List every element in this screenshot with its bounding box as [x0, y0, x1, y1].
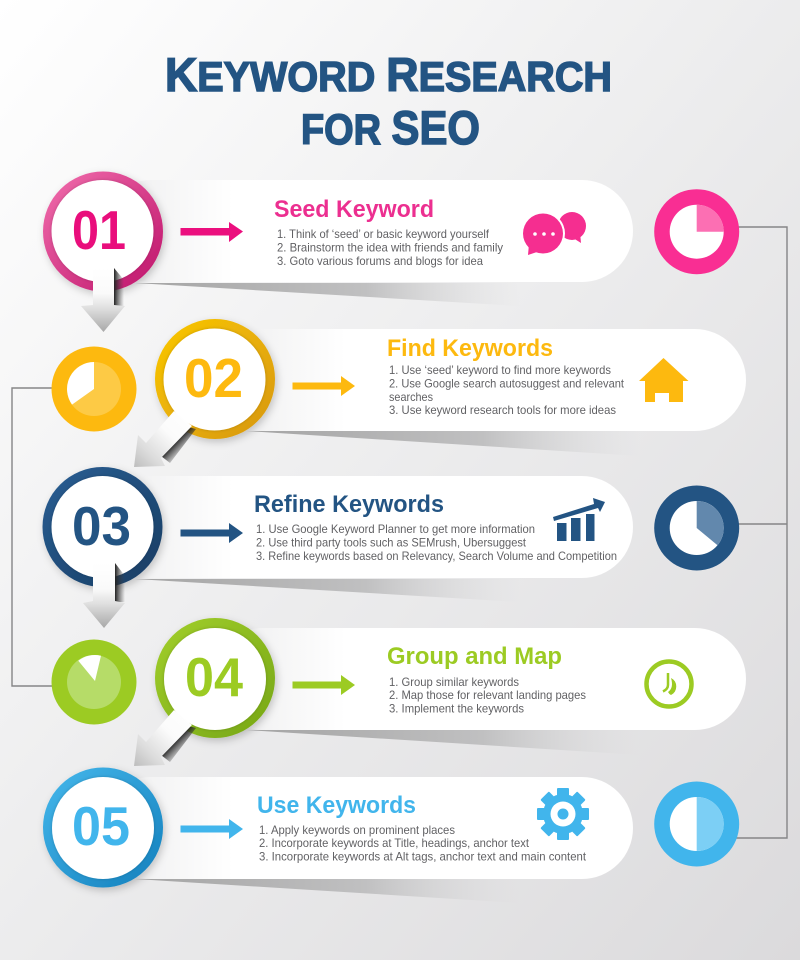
- list: 3. Goto various forums and blogs for idea: [277, 255, 484, 268]
- content pill: [212, 329, 746, 431]
- list: 2. Use third party tools such as SEMrush, Ubersuggest: [256, 536, 527, 550]
- right arrow: [180, 523, 243, 543]
- heading: Find Keywords: [387, 335, 553, 362]
- list: [277, 228, 503, 268]
- list: [389, 364, 625, 417]
- list: 1. Apply keywords on prominent places: [259, 824, 455, 837]
- icon: ring with note: [646, 662, 692, 706]
- heading: Seed Keyword: [274, 196, 434, 223]
- connector lines: [12, 227, 787, 838]
- list: 2. Map those for relevant landing pages: [389, 689, 586, 702]
- pie: small slice: [52, 640, 136, 724]
- right arrow: [292, 675, 355, 695]
- down arrow: [81, 268, 125, 332]
- down arrow: [83, 563, 125, 628]
- content pill: [100, 476, 633, 578]
- list: [256, 523, 617, 563]
- list: [389, 676, 586, 716]
- number badge 02: [155, 319, 275, 439]
- step 3: refine keywords: [42, 467, 739, 628]
- list: 3. Implement the keywords: [389, 702, 524, 716]
- list: 2. Incorporate keywords at Title, headings, anchor text: [259, 837, 530, 850]
- list: 1. Use ‘seed’ keyword to find more keywords: [389, 364, 611, 377]
- list: searches: [389, 391, 433, 404]
- title: [165, 49, 612, 155]
- content pill: [100, 180, 633, 282]
- list: 3. Use keyword research tools for more ideas: [389, 404, 616, 417]
- icon: gear: [537, 788, 589, 840]
- number badge 05: 05: [72, 795, 130, 857]
- number badge 03: 03: [72, 495, 131, 557]
- diagonal arrow: [134, 411, 196, 467]
- shadow wedge: [247, 730, 640, 755]
- number badge 03: [42, 467, 162, 587]
- number badge 02: 02: [184, 347, 243, 409]
- number badge 05: [43, 768, 163, 888]
- right arrow: [292, 376, 355, 396]
- content pill: [212, 628, 746, 730]
- icon: chat bubbles: [521, 212, 586, 256]
- right arrow: [180, 819, 243, 839]
- step 2: find keywords: [52, 319, 746, 467]
- heading: Refine Keywords: [254, 491, 444, 518]
- list: 3. Incorporate keywords at Alt tags, anchor text and main content: [259, 850, 587, 864]
- icon: growth chart: [553, 498, 605, 541]
- pie: quarter: [654, 189, 739, 274]
- pie: two thirds: [52, 346, 136, 432]
- number badge 04: [155, 618, 275, 738]
- pie: half: [654, 782, 739, 866]
- right arrow: [180, 222, 243, 242]
- number badge 01: 01: [72, 199, 126, 261]
- pie: sixty percent: [654, 486, 739, 570]
- shadow wedge: [135, 579, 520, 602]
- list: 1. Think of ‘seed’ or basic keyword yourself: [277, 228, 490, 241]
- title: FOR SEO: [301, 102, 480, 155]
- diagonal arrow: [134, 710, 196, 766]
- shadow wedge: [247, 431, 640, 456]
- list: 1. Group similar keywords: [389, 676, 519, 689]
- title: KEYWORD RESEARCH: [165, 49, 612, 102]
- list: 2. Use Google search autosuggest and relevant: [389, 378, 625, 390]
- list: 1. Use Google Keyword Planner to get more information: [256, 523, 535, 536]
- content pill: [100, 777, 633, 879]
- number badge 04: 04: [185, 646, 243, 708]
- shadow wedge: [135, 879, 520, 903]
- list: 2. Brainstorm the idea with friends and family: [277, 242, 503, 254]
- icon: house: [639, 358, 688, 402]
- list: [259, 824, 587, 864]
- step 1: seed keyword: [43, 172, 739, 332]
- heading: Group and Map: [387, 643, 562, 670]
- number badge 01: [43, 172, 163, 292]
- list: 3. Refine keywords based on Relevancy, Search Volume and Competition: [256, 550, 617, 563]
- step 5: use keywords: [43, 768, 739, 903]
- shadow wedge: [135, 283, 520, 306]
- step 4: group and map: [52, 618, 746, 766]
- heading: Use Keywords: [257, 792, 416, 819]
